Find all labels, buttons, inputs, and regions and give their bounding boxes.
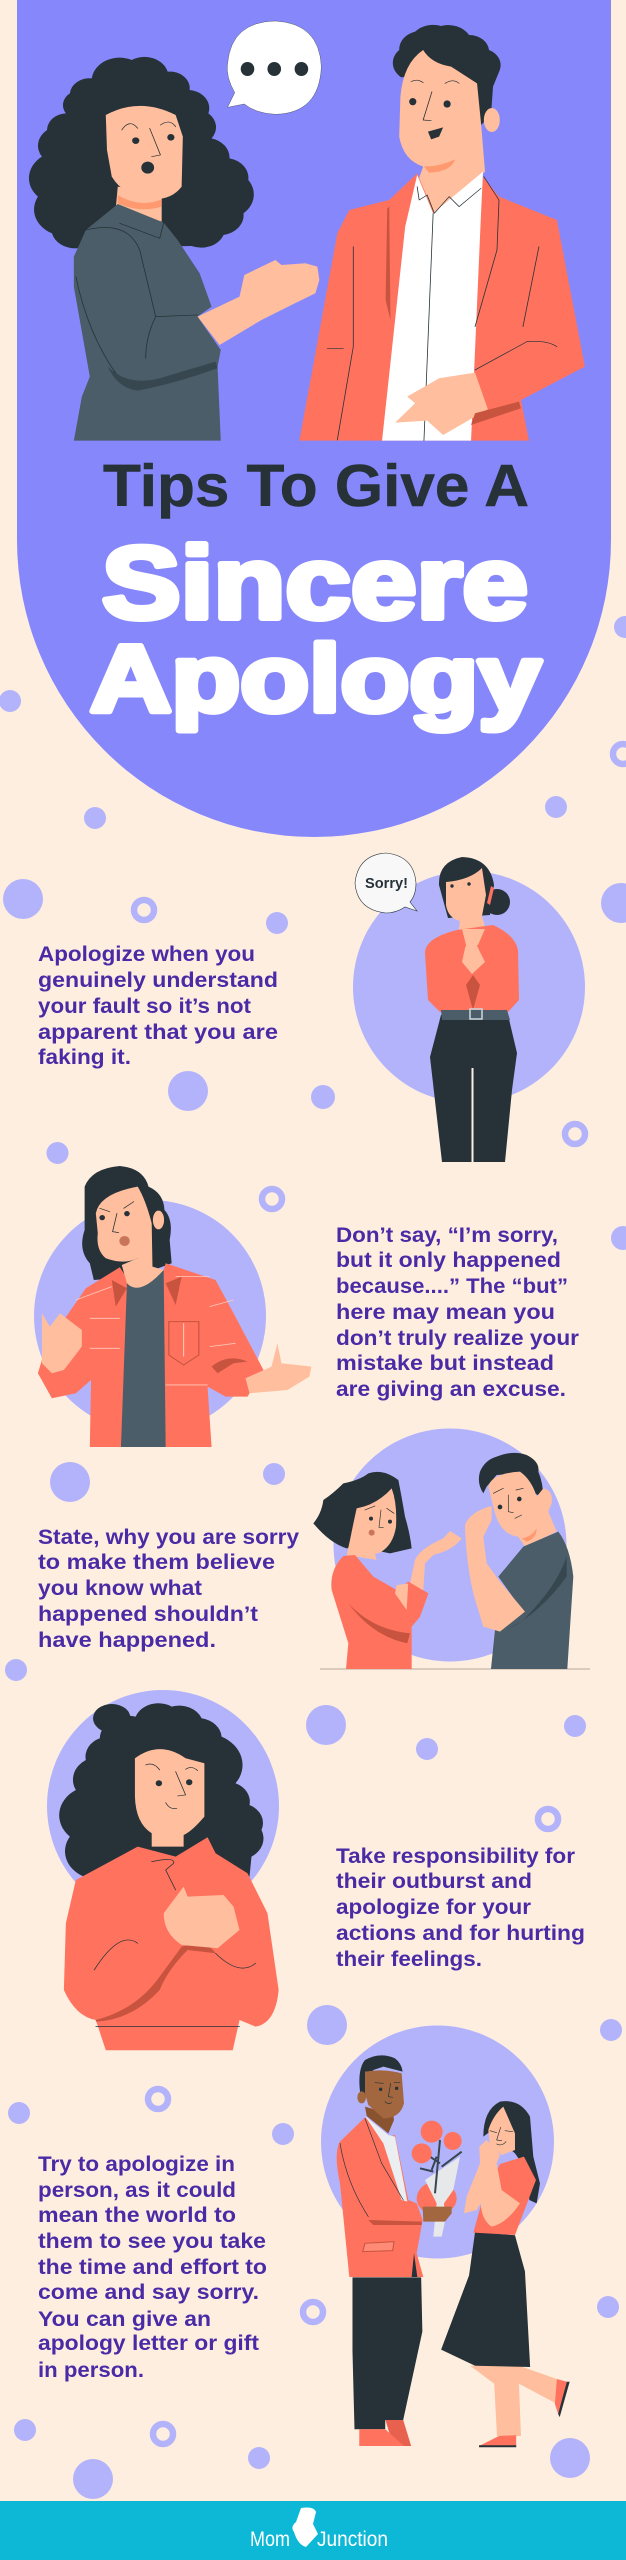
text: tip 5: apology letter or gift: [38, 2331, 259, 2355]
text: tip 1: [38, 942, 278, 1069]
text: tip 2: are giving an excuse.: [336, 1377, 566, 1401]
illustration: person in plaid shirt: [38, 1166, 311, 1447]
text: tip 4: their outburst and: [336, 1869, 532, 1893]
panel: tip 4: [47, 1690, 585, 2050]
title: Apology: [90, 626, 541, 732]
panel: tip 3: [38, 1428, 590, 1669]
illustration: couple talking: [313, 1453, 590, 1669]
illustration: man offering flowers to woman: [337, 2055, 540, 2277]
text: tip 5: them to see you take: [38, 2229, 266, 2253]
text: tip 5: the time and effort to: [38, 2255, 267, 2279]
logo: MomJunction: Junction: [317, 2528, 388, 2551]
panel: tip 1: [38, 853, 585, 1162]
text: tip 5: in person.: [38, 2358, 144, 2382]
man in coral jacket: [299, 25, 585, 441]
text: tip 3: [38, 1525, 299, 1652]
text: tip 1: apparent that you are: [38, 1020, 278, 1044]
title: Sincere: [102, 526, 528, 640]
illustration: legs of the couple: [352, 2232, 570, 2447]
speech bubble: [227, 21, 321, 114]
text: tip 4: their feelings.: [336, 1947, 482, 1971]
backdrop circle 4: [47, 1690, 279, 1922]
backdrop circle 3: [334, 1428, 566, 1662]
text: tip 2: Don’t say, “I’m sorry,: [336, 1223, 558, 1247]
text: tip 4: [336, 1844, 585, 1971]
illustration: woman apologising: [425, 857, 519, 1162]
panel: tip 5: [38, 2026, 570, 2447]
text: tip 2: [336, 1223, 580, 1401]
backdrop circle 1: [353, 871, 585, 1103]
text: tip 5: come and say sorry.: [38, 2280, 259, 2304]
text: tip 2: mistake but instead: [336, 1351, 554, 1375]
text: tip 1: genuinely understand: [38, 968, 278, 992]
text: tip 5: [38, 2152, 267, 2382]
title: [90, 453, 541, 732]
text: tip 3: you know what: [38, 1576, 202, 1600]
text: tip 5: You can give an: [38, 2307, 211, 2331]
text: tip 4: Take responsibility for: [336, 1844, 576, 1868]
logo: MomJunction: [250, 2508, 388, 2551]
text: tip 5: person, as it could: [38, 2178, 236, 2202]
text: tip 2: here may mean you: [336, 1300, 555, 1324]
speech bubble: Sorry!: [355, 853, 417, 913]
backdrop circle 2: [34, 1200, 266, 1432]
text: tip 4: actions and for hurting: [336, 1921, 585, 1945]
hero illustration: [29, 21, 585, 441]
speech bubble: Sorry!: Sorry!: [365, 876, 408, 892]
text: tip 3: have happened.: [38, 1628, 216, 1652]
text: tip 3: happened shouldn’t: [38, 1602, 258, 1626]
illustration: woman in hoodie, hand on heart: [59, 1703, 279, 2050]
footer bar with logo: [0, 2501, 626, 2560]
backdrop circle 5: [321, 2026, 554, 2258]
text: tip 1: Apologize when you: [38, 942, 255, 966]
text: tip 2: don’t truly realize your: [336, 1326, 580, 1350]
panel: tip 2: [34, 1166, 580, 1447]
text: tip 1: faking it.: [38, 1045, 131, 1069]
woman in grey shirt: [29, 57, 319, 441]
text: tip 5: mean the world to: [38, 2203, 236, 2227]
text: tip 1: your fault so it’s not: [38, 994, 251, 1018]
background dots: [0, 616, 626, 2499]
text: tip 2: because....” The “but”: [336, 1274, 568, 1298]
text: tip 2: but it only happened: [336, 1248, 561, 1272]
text: tip 5: Try to apologize in: [38, 2152, 235, 2176]
panel: header arch: [17, 0, 611, 837]
logo: MomJunction: Mom: [250, 2528, 290, 2551]
text: tip 3: State, why you are sorry: [38, 1525, 299, 1549]
text: tip 3: to make them believe: [38, 1550, 275, 1574]
title: Tips To Give A: [103, 453, 529, 519]
text: tip 4: apologize for your: [336, 1895, 532, 1919]
